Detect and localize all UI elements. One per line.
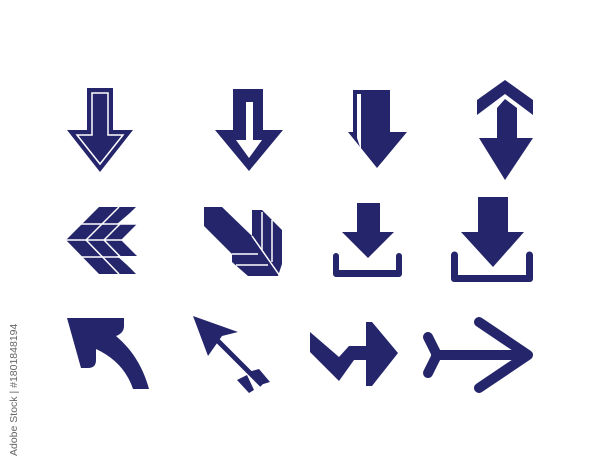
icon: outlined down arrow xyxy=(67,88,133,172)
icon: long right arrow xyxy=(428,322,528,388)
icon: layered left chevrons xyxy=(66,207,137,274)
icon: down arrow with inner white arrow xyxy=(215,89,283,171)
icon: download large xyxy=(451,197,533,282)
watermark side text: Adobe Stock | #1801848194 xyxy=(8,324,20,456)
icon: arrow with fletching xyxy=(193,316,270,393)
icon: zigzag right arrow xyxy=(310,322,398,386)
icon: download small xyxy=(333,203,402,277)
icon: curved up-left arrow xyxy=(67,318,149,389)
icon: thin folded down arrow xyxy=(348,90,407,168)
icon: diagonal layered arrow xyxy=(204,207,282,276)
icon: chevron up over down arrow xyxy=(477,80,533,180)
